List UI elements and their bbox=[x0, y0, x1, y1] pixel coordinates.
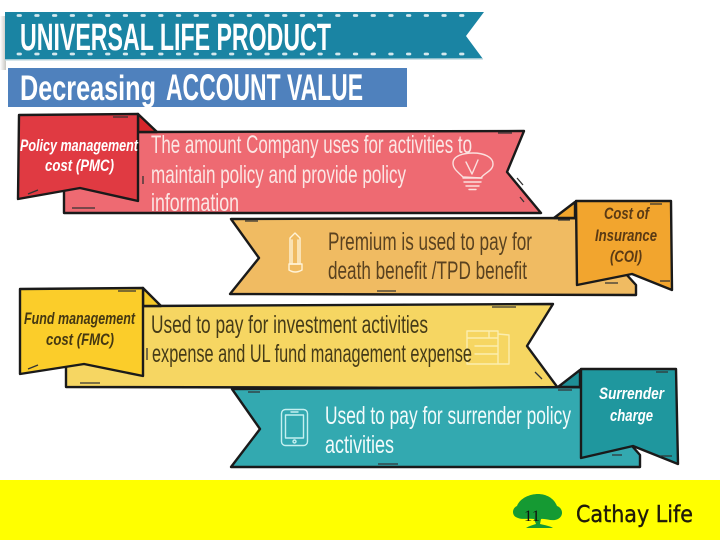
icon: folder bbox=[467, 331, 509, 364]
flag: red bbox=[18, 114, 138, 201]
subtitle text: account value: ACCOUNT VALUE bbox=[166, 67, 363, 108]
description text: Used to pay for investment activities bbox=[151, 311, 428, 339]
flag label: Fund management bbox=[24, 309, 136, 328]
flag label: (COI) bbox=[610, 247, 642, 266]
description text bbox=[151, 131, 472, 217]
flag fold: teal bbox=[558, 370, 580, 387]
flag label bbox=[20, 136, 139, 175]
flag label: Insurance bbox=[595, 226, 657, 245]
description text: Used to pay for surrender policy bbox=[325, 402, 571, 430]
footer bar bbox=[0, 480, 720, 540]
flag: orange bbox=[576, 201, 672, 290]
ribbon: red bbox=[64, 131, 541, 213]
flag label bbox=[24, 309, 136, 349]
flag: yellow bbox=[20, 288, 143, 376]
description text: expense and UL fund management expense bbox=[152, 340, 472, 368]
ribbon: orange bbox=[230, 218, 636, 295]
panel: fund management cost bbox=[20, 288, 558, 388]
subtitle text: decreasing: Decreasing bbox=[20, 69, 156, 108]
description text: Premium is used to pay for bbox=[328, 228, 532, 256]
subtitle bar bbox=[8, 67, 407, 108]
flag: teal bbox=[581, 369, 678, 464]
ribbon: teal bbox=[231, 387, 640, 467]
flag label: Surrender bbox=[599, 384, 665, 403]
icon: light bulb bbox=[453, 153, 493, 190]
flag label: Policy management bbox=[20, 136, 139, 155]
ribbon: yellow bbox=[66, 304, 558, 388]
description text: information bbox=[151, 189, 239, 217]
icon: pencil bbox=[289, 233, 302, 272]
panel: surrender charge bbox=[231, 369, 678, 467]
panel: cost of insurance bbox=[230, 197, 672, 295]
description text: maintain policy and provide policy bbox=[151, 161, 406, 189]
panel: policy management cost bbox=[18, 114, 541, 217]
description text bbox=[325, 402, 571, 459]
flag label: Cost of bbox=[604, 204, 651, 223]
description text: activities bbox=[325, 431, 394, 459]
flag label: cost (FMC) bbox=[46, 330, 114, 349]
flag label: cost (PMC) bbox=[45, 156, 114, 175]
flag fold: yellow bbox=[143, 288, 161, 306]
flag label: charge bbox=[610, 406, 653, 425]
description text: The amount Company uses for activities to bbox=[151, 131, 472, 159]
icon: smartphone bbox=[282, 410, 308, 446]
page number: 11 bbox=[524, 508, 540, 525]
title text: UNIVERSAL LIFE PRODUCT bbox=[20, 17, 331, 59]
flag fold: red bbox=[138, 114, 157, 132]
title banner bbox=[5, 12, 484, 60]
description text bbox=[151, 311, 472, 368]
logo: tree bbox=[513, 494, 562, 528]
flag fold: orange bbox=[554, 202, 575, 218]
flag label bbox=[595, 204, 657, 266]
description text bbox=[328, 228, 532, 285]
logo text: Cathay Life bbox=[576, 502, 693, 528]
flag label bbox=[599, 384, 665, 425]
description text: death benefit /TPD benefit bbox=[328, 257, 527, 285]
